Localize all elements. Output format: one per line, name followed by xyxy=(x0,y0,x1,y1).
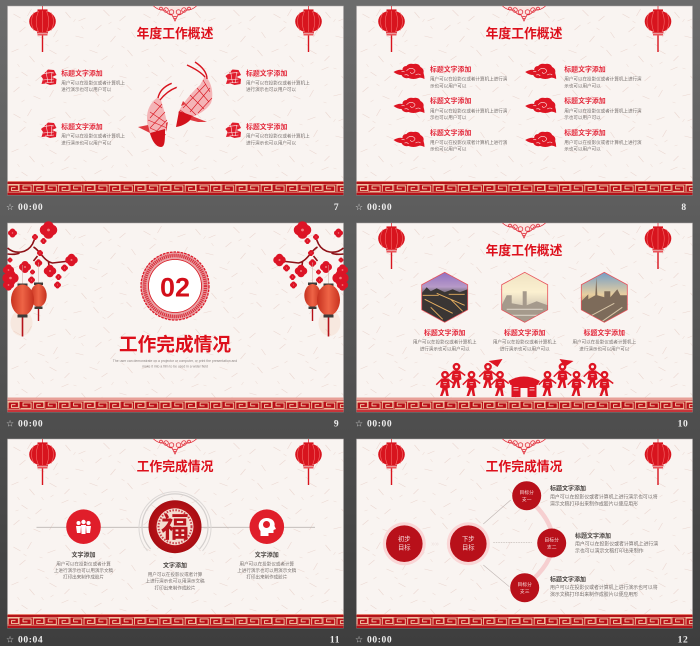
text block 2: 示也可以用户可以 xyxy=(564,82,601,89)
text block: right bottom: 用户可以在投影仪或者计算机上 xyxy=(246,133,310,140)
title: 年度工作概述 xyxy=(137,26,214,41)
paper background xyxy=(8,223,344,412)
text block: left bottom xyxy=(61,122,125,146)
icon: cloud 2 xyxy=(525,64,556,79)
text block 1: 标题文字添加 xyxy=(430,64,471,74)
text block: right: 用户可以在投影仪或者计算机上 xyxy=(572,339,637,346)
text block: left: 文字添加 xyxy=(71,551,96,559)
border band xyxy=(356,398,692,412)
text block: centre: 用户可以在投影仪或者计算 xyxy=(148,571,203,578)
node: branch one: 支一 xyxy=(522,496,532,503)
photo: skyline hexagon xyxy=(580,271,628,323)
text block: branch three: 演示文稿打印出来制作成胶片以便应用形 xyxy=(550,591,638,598)
footer: slide 11: 00:04 xyxy=(18,636,43,646)
text block: branch one: 用户可以在投影仪或者计算机上进行演示也可以将 xyxy=(550,493,658,500)
icon: left lantern xyxy=(378,439,405,485)
node: branch three xyxy=(510,573,539,602)
panel: slide 7 xyxy=(8,6,344,195)
illustration: koi fish xyxy=(138,62,212,147)
icon: fu right bottom xyxy=(226,122,241,138)
node: initial goal xyxy=(383,522,426,565)
text block 4: 标题文字添加 xyxy=(564,96,606,105)
text block: middle: 进行演示也可以用户可以 xyxy=(500,346,550,353)
subtitle: The user can demonstrate on a projector or computer, or print the presentation and xyxy=(113,359,237,363)
footer: slide 10: ☆ xyxy=(355,420,363,430)
border band xyxy=(356,614,692,628)
text block: left top: 标题文字添加 xyxy=(61,68,103,78)
panel: slide 8 xyxy=(356,6,692,195)
icon: left lantern xyxy=(378,6,405,52)
panel: slide 11 xyxy=(8,439,344,628)
photo: night city hexagon xyxy=(421,271,469,323)
text block 3: 标题文字添加 xyxy=(430,96,471,105)
illustration: paper-cut children and gate xyxy=(436,359,613,397)
icon: cloud 4 xyxy=(525,98,556,113)
border band xyxy=(356,181,692,195)
text block: left bottom: 进行演示也可以用户可以 xyxy=(61,139,112,146)
node: branch two: 目标分 xyxy=(544,536,559,543)
footer: slide 10: 10 xyxy=(678,420,688,430)
border band xyxy=(8,614,344,628)
paper background xyxy=(8,6,344,195)
paper background xyxy=(356,223,692,412)
footer: slide 9 xyxy=(6,420,339,430)
text block: branch three: 用户可以在投影仪或者计算机上进行演示也可以将 xyxy=(550,584,658,591)
panel: slide 9 xyxy=(2,221,349,412)
text block 5: 用户可以在投影仪或者计算机上进行演 xyxy=(430,139,508,146)
node: branch three: 目标分 xyxy=(517,581,532,588)
icon: right lantern xyxy=(645,439,671,485)
icon: right lantern xyxy=(295,439,322,485)
footer: slide 12: 12 xyxy=(678,636,688,646)
text block: left: 标题文字添加 xyxy=(424,328,465,337)
text block 5: 标题文字添加 xyxy=(430,128,471,137)
text block: left: 用户可以在投影仪或者计算 xyxy=(56,560,111,567)
paper background xyxy=(356,6,692,195)
text block 1 xyxy=(430,64,508,89)
text block: right xyxy=(572,328,637,353)
heading: 工作完成情况 xyxy=(119,334,231,355)
icon: right lantern xyxy=(295,6,322,52)
node: fu medallion xyxy=(139,492,211,553)
icon: right lantern xyxy=(645,6,671,52)
footer: slide 7: ☆ xyxy=(6,203,14,213)
footer: slide 9: 9 xyxy=(334,420,339,430)
icon: cloud 1 xyxy=(394,64,424,79)
icon: right lantern xyxy=(645,223,671,269)
icon: fu left top xyxy=(41,70,56,85)
text block: centre: 上进行演示也可以用演示文稿 xyxy=(145,578,205,585)
footer: slide 7: 00:00 xyxy=(18,203,43,213)
icon: fu left bottom xyxy=(41,122,56,138)
text block: right top xyxy=(246,68,310,93)
illustration: blossom and lanterns left xyxy=(2,221,78,336)
node: branch two: 支二 xyxy=(547,543,557,550)
icon: left lantern xyxy=(378,223,405,269)
paper background xyxy=(8,439,344,628)
text block: branch three: 标题文字添加 xyxy=(550,575,586,583)
text block 6: 示也可以用户可以 xyxy=(564,146,601,153)
title: 年度工作概述 xyxy=(486,26,563,41)
text block: right bottom: 进行演示也可以用户可以 xyxy=(246,139,296,146)
illustration: blossom and lanterns right xyxy=(273,221,349,336)
footer: slide 11: ☆ xyxy=(6,636,14,646)
text block: left xyxy=(413,328,477,353)
text block: branch two: 标题文字添加 xyxy=(575,532,611,540)
connector lines xyxy=(483,500,532,587)
text block: left top: 进行演示也可以用户可以 xyxy=(61,86,112,93)
text block: left top: 用户可以在投影仪或者计算机上 xyxy=(61,79,125,86)
text block 2 xyxy=(564,64,642,89)
badge: 02 xyxy=(141,252,209,320)
text block: middle xyxy=(493,328,557,353)
text block: branch one: 标题文字添加 xyxy=(550,485,586,493)
node: next goal: 下步 xyxy=(462,535,475,543)
footer: slide 12: 00:00 xyxy=(367,636,392,646)
text block: branch two xyxy=(575,532,658,555)
node: head xyxy=(249,509,284,544)
icon: fu right top xyxy=(226,70,241,85)
text block: right bottom xyxy=(246,122,310,146)
text block: middle: 用户可以在投影仪或者计算机上 xyxy=(493,339,557,346)
footer: slide 11 xyxy=(6,636,340,646)
connector arc xyxy=(526,499,553,585)
text block 5: 示也可以用户可以 xyxy=(430,146,467,153)
node: initial goal: 初步 xyxy=(398,534,411,543)
paper background xyxy=(356,439,692,628)
footer: slide 8 xyxy=(355,203,687,213)
timeline line xyxy=(36,526,315,528)
text block: right: 用户可以在投影仪或者计算 xyxy=(240,560,295,567)
text block: branch one: 演示文稿打印出来制作成胶片以便应用形 xyxy=(550,501,638,508)
text block 3: 用户可以在投影仪或者计算机上进行演 xyxy=(430,107,508,114)
icon: top ornament xyxy=(154,439,196,454)
footer: slide 9: ☆ xyxy=(6,420,14,430)
text block: centre xyxy=(145,562,205,591)
footer: slide 8: 00:00 xyxy=(367,203,392,213)
text block: right top: 进行演示也可以用户可以 xyxy=(246,86,296,93)
photo: bright city hexagon xyxy=(501,271,549,323)
text block: left xyxy=(54,551,114,581)
icon: top ornament xyxy=(502,6,546,21)
text block 3: 示也可以用户可以 xyxy=(430,114,467,121)
footer: slide 7: 7 xyxy=(334,203,339,213)
node: branch one: 目标分 xyxy=(519,489,534,496)
text block: branch two: 用户可以在投影仪或者计算机上进行演 xyxy=(575,541,658,548)
node: next goal xyxy=(447,522,490,565)
icon: cloud 6 xyxy=(525,132,556,147)
text block: middle: 标题文字添加 xyxy=(504,328,545,337)
footer: slide 11: 11 xyxy=(330,636,340,646)
text block: right: 打印出来制作成胶片 xyxy=(246,574,288,581)
icon: top ornament xyxy=(502,439,546,454)
node: branch two xyxy=(537,528,566,558)
text block 2: 标题文字添加 xyxy=(564,64,606,74)
text block 1: 示也可以用户可以 xyxy=(430,82,467,89)
footer: slide 8: 8 xyxy=(681,203,687,213)
icon: top ornament xyxy=(502,223,546,238)
text block 4: 用户可以在投影仪或者计算机上进行演 xyxy=(564,107,642,114)
panel: slide 10 xyxy=(356,223,692,412)
text block 2: 用户可以在投影仪或者计算机上进行演 xyxy=(564,76,642,83)
text block: right: 进行演示也可以用户可以 xyxy=(579,346,630,353)
text block: right: 标题文字添加 xyxy=(584,328,625,337)
panel: slide 12 xyxy=(356,439,692,628)
text block 6: 标题文字添加 xyxy=(564,128,606,137)
icon: left lantern xyxy=(29,6,56,52)
footer: slide 10 xyxy=(355,420,688,430)
text block 1: 用户可以在投影仪或者计算机上进行演 xyxy=(430,76,508,83)
text block 6 xyxy=(564,128,642,153)
text block: right xyxy=(237,551,297,581)
text block 4: 示也可以用户可以 xyxy=(564,114,601,121)
text block: right bottom: 标题文字添加 xyxy=(246,122,287,131)
icon: left lantern xyxy=(29,439,56,485)
icon: cloud 3 xyxy=(394,98,424,113)
icon: cloud 5 xyxy=(394,132,424,147)
title: 工作完成情况 xyxy=(486,459,563,474)
text block 4 xyxy=(564,96,642,121)
text block: right top: 用户可以在投影仪或者计算机上 xyxy=(246,79,310,86)
node: branch one xyxy=(512,481,541,510)
text block: left bottom: 标题文字添加 xyxy=(61,122,103,131)
text block 6: 用户可以在投影仪或者计算机上进行演 xyxy=(564,139,642,146)
text block: branch three xyxy=(550,575,658,598)
node: fu medallion: 福 xyxy=(161,512,189,543)
footer: slide 10: 00:00 xyxy=(367,420,392,430)
node: branch three: 支三 xyxy=(520,588,530,595)
text block: left bottom: 用户可以在投影仪或者计算机上 xyxy=(61,133,125,140)
text block: branch one xyxy=(550,485,658,508)
text block: branch two: 示也可以演示文稿打印出来制作 xyxy=(575,548,644,555)
title: 年度工作概述 xyxy=(486,243,563,258)
text block: left: 进行演示也可以用户可以 xyxy=(420,346,470,353)
node: initial goal: 目标 xyxy=(398,542,411,552)
text block: centre: 打印出来制作成胶片 xyxy=(155,584,196,591)
icon: top ornament xyxy=(154,6,196,21)
text block: left: 上进行演示也可以用演示文稿 xyxy=(54,567,114,574)
subtitle: make it into a film to be used in a wider field xyxy=(142,364,208,368)
text block 3 xyxy=(430,96,508,121)
footer: slide 8: ☆ xyxy=(355,203,363,213)
text block: left: 打印出来制作成胶片 xyxy=(63,574,104,581)
text block: right: 文字添加 xyxy=(255,551,279,559)
subtitle xyxy=(113,359,237,368)
footer: slide 12: ☆ xyxy=(355,636,363,646)
text block 5 xyxy=(430,128,508,153)
footer: slide 9: 00:00 xyxy=(18,420,43,430)
border band xyxy=(8,398,344,412)
badge: 02: 02 xyxy=(160,272,190,302)
text block: centre: 文字添加 xyxy=(163,562,187,570)
footer: slide 12 xyxy=(355,636,688,646)
footer: slide 7 xyxy=(6,203,339,213)
text block: right top: 标题文字添加 xyxy=(246,68,287,78)
text block: right: 上进行演示也可以用演示文稿 xyxy=(237,567,297,574)
node: next goal: 目标 xyxy=(462,542,475,552)
text block: left top xyxy=(61,68,125,93)
border band xyxy=(8,181,344,195)
title: 工作完成情况 xyxy=(137,459,214,474)
text block: left: 用户可以在投影仪或者计算机上 xyxy=(413,339,477,346)
node: people xyxy=(66,509,101,544)
arrow: between goals: »» xyxy=(431,541,439,548)
